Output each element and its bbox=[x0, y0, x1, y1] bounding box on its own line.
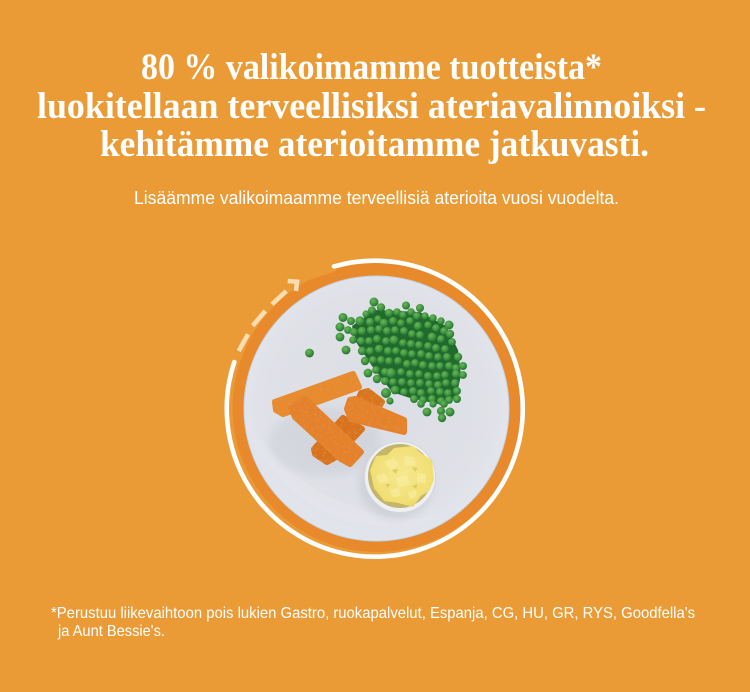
title bbox=[37, 47, 706, 165]
title: 80 % valikoimamme tuotteista* bbox=[141, 47, 602, 88]
plate graphic with progress ring bbox=[227, 255, 523, 557]
peas bbox=[305, 298, 467, 422]
white progress ring bbox=[227, 261, 523, 557]
title: kehitämme aterioitamme jatkuvasti. bbox=[100, 124, 649, 165]
footnote: *Perustuu liikevaihtoon pois lukien Gastro, ruokapalvelut, Espanja, CG, HU, GR, RYS, Goodfella's bbox=[51, 605, 695, 622]
plate bbox=[244, 276, 509, 541]
subtitle: Lisäämme valikoimaamme terveellisiä aterioita vuosi vuodelta. bbox=[134, 188, 619, 208]
footnote bbox=[51, 605, 695, 640]
title: luokitellaan terveellisiksi ateriavalinnoiksi - bbox=[37, 86, 706, 127]
ramekin with mashed potato bbox=[359, 442, 436, 519]
dark orange band around plate bbox=[228, 255, 522, 552]
dashed arrow bbox=[239, 281, 297, 351]
footnote: ja Aunt Bessie's. bbox=[57, 623, 165, 640]
fish sticks bbox=[269, 374, 404, 476]
